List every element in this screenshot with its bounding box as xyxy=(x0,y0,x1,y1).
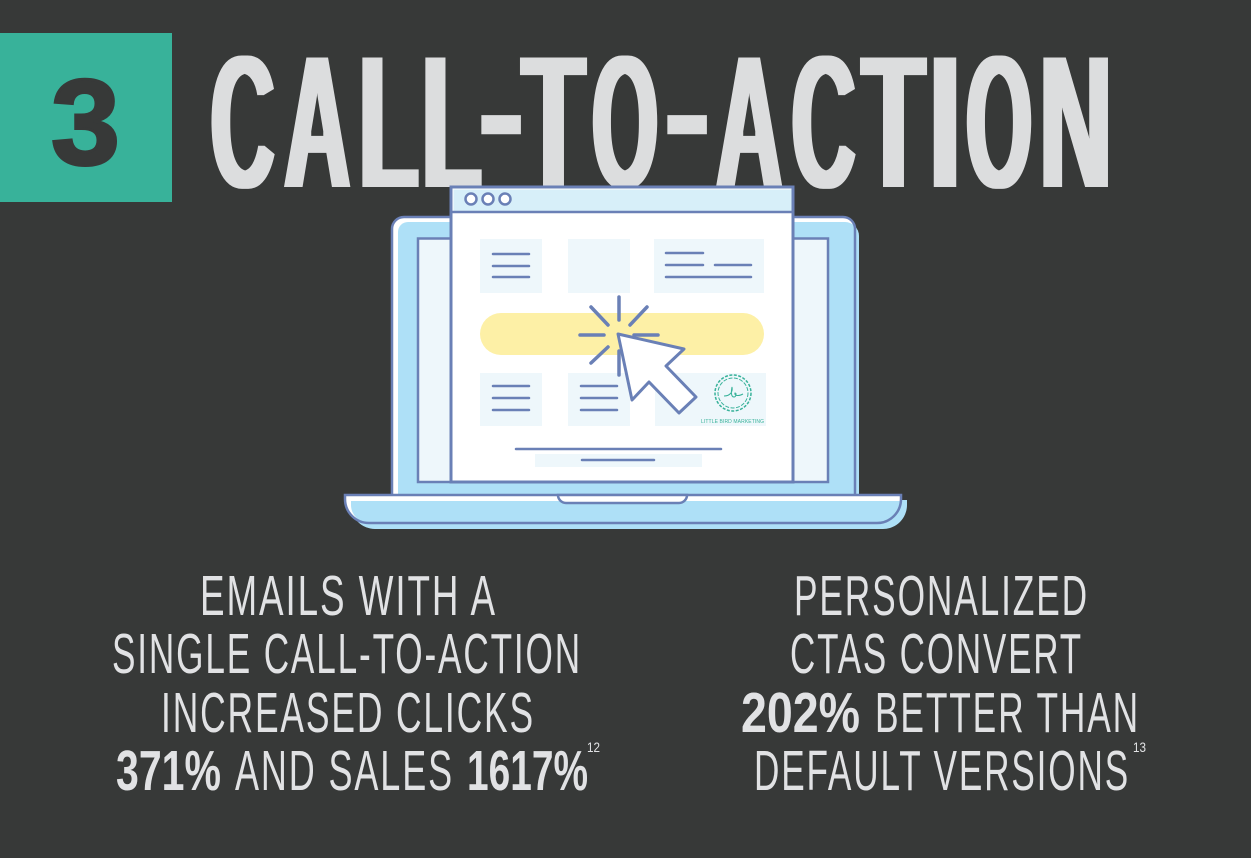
title: L xyxy=(359,14,419,231)
right statistic text xyxy=(741,564,1146,803)
title: C xyxy=(211,14,275,231)
title: A xyxy=(284,14,350,231)
title: N xyxy=(1040,14,1112,231)
title: O xyxy=(592,14,658,231)
left statistic text: AND SALES xyxy=(235,739,454,803)
page content blocks xyxy=(480,239,766,467)
left statistic text: SINGLE CALL-TO-ACTION xyxy=(112,622,582,686)
title: - xyxy=(665,0,709,217)
title: T xyxy=(862,14,925,231)
right statistic text: 202% xyxy=(741,681,860,745)
title: C xyxy=(792,14,856,231)
right statistic text: 13 xyxy=(1133,739,1146,755)
laptop illustration xyxy=(345,187,907,529)
laptop lid xyxy=(392,217,859,495)
title: O xyxy=(966,14,1032,231)
title: T xyxy=(522,14,585,231)
logo: Little Bird Marketing xyxy=(701,375,764,425)
title: I xyxy=(929,14,961,231)
title: - xyxy=(479,0,523,217)
laptop base xyxy=(345,495,907,529)
left statistic text: 371% xyxy=(116,739,221,803)
title: L xyxy=(422,14,482,231)
title: A xyxy=(716,14,782,231)
left statistic text: 12 xyxy=(587,739,600,755)
left statistic text: 1617% xyxy=(467,739,588,803)
number badge xyxy=(0,33,172,202)
logo: Little Bird Marketing: LITTLE BIRD MARKETING xyxy=(701,419,764,425)
browser window xyxy=(451,187,793,482)
left statistic text: INCREASED CLICKS xyxy=(161,681,535,745)
cursor arrow xyxy=(618,334,696,413)
left statistic text xyxy=(112,564,600,803)
click burst xyxy=(580,297,658,375)
number badge: 3 xyxy=(51,54,120,190)
call-to-action button xyxy=(480,313,764,355)
left statistic text: EMAILS WITH A xyxy=(200,564,497,628)
